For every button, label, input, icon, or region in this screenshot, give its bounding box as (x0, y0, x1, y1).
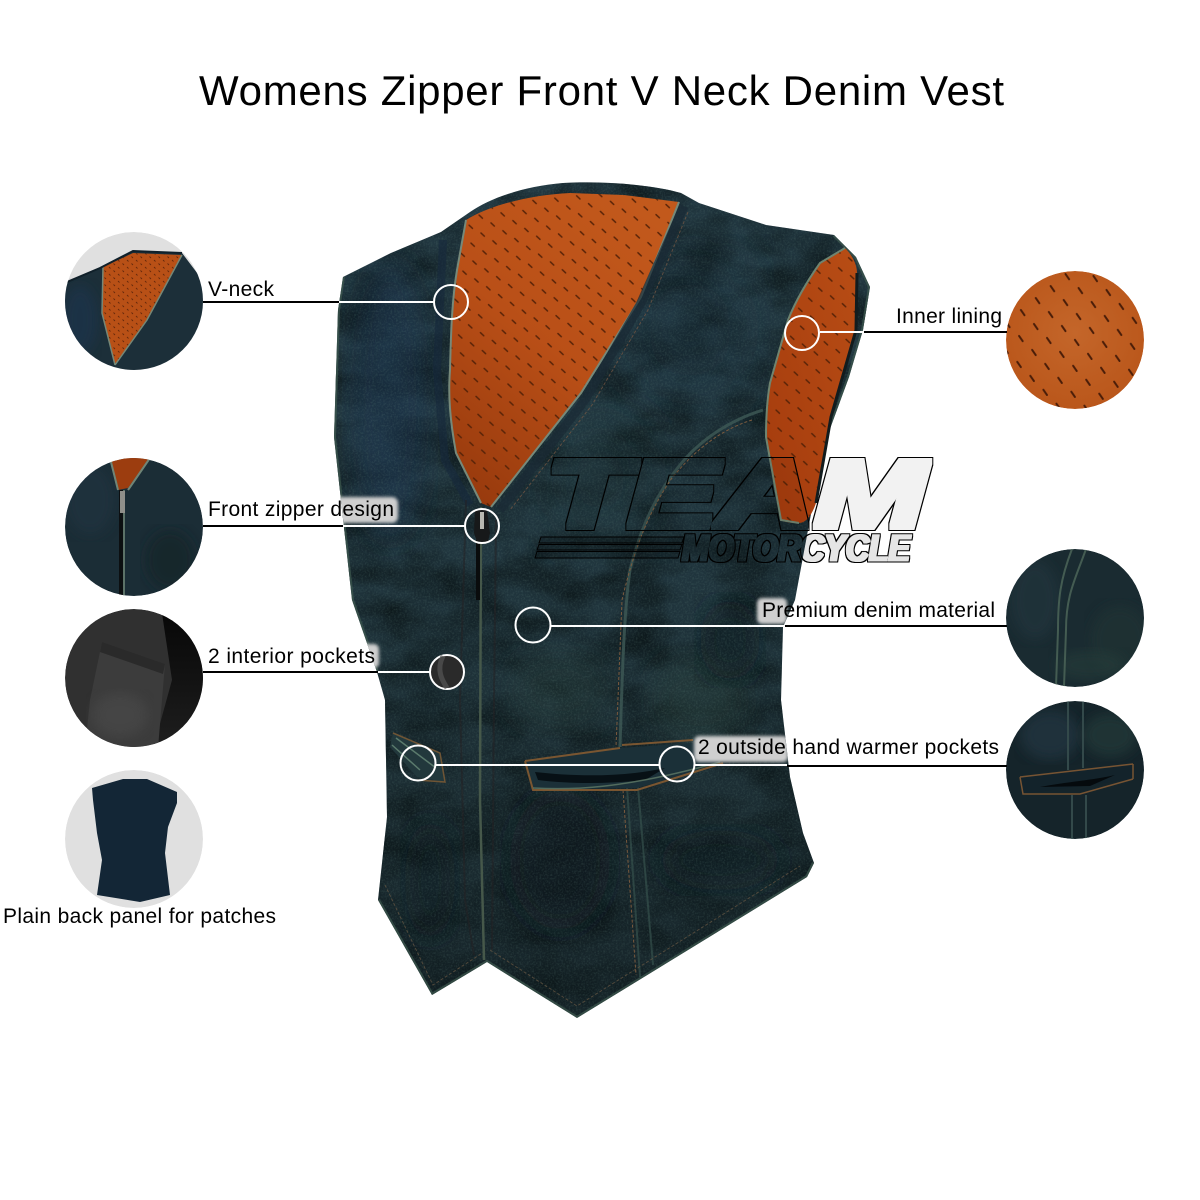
thumbnail: premium denim (1006, 549, 1150, 687)
outer armhole and hem edges (334, 235, 870, 1018)
inner mesh lining at the neck (449, 193, 679, 507)
callout: 2 interior pockets (203, 645, 464, 689)
callout: inner lining (785, 305, 1007, 350)
watermark logo: MOTORCYCLE (682, 528, 911, 570)
hand warmer pocket, right side (525, 740, 723, 790)
thumbnail: plain back panel (65, 770, 203, 908)
inner mesh lining at the armhole (766, 248, 857, 523)
front zipper (474, 507, 490, 960)
callout: front zipper design (203, 498, 499, 543)
callout: inner lining: Inner lining (896, 305, 1002, 328)
callout: front zipper design: Front zipper design (208, 498, 394, 521)
callout: 2 outside hand warmer pockets: 2 outside hand warmer pockets (698, 736, 999, 759)
title: Womens Zipper Front V Neck Denim Vest (199, 67, 1004, 114)
thumbnail: inner lining (1006, 271, 1144, 409)
hand warmer pocket, left side (390, 733, 445, 782)
callout: 2 outside hand warmer pockets (400, 736, 1007, 782)
watermark logo: TEAM (546, 441, 929, 548)
callout: plain back panel: Plain back panel for patches (3, 905, 276, 928)
callout: premium denim material: Premium denim material (762, 599, 995, 622)
thumbnail: hand warmer pocket (1006, 701, 1144, 839)
thumbnail: v-neck (65, 232, 203, 370)
watermark logo (535, 441, 929, 570)
thumbnail: interior pockets (65, 609, 203, 747)
label halos over the vest (336, 497, 788, 762)
callout: 2 interior pockets: 2 interior pockets (208, 645, 375, 668)
callout: v-neck: V-neck (208, 278, 274, 301)
thumbnail: front zipper (65, 458, 203, 600)
vest seams and stitching (385, 206, 800, 1006)
denim vest illustration (330, 180, 875, 1020)
callout: premium denim material (516, 599, 1007, 642)
callout: v-neck (203, 278, 468, 319)
